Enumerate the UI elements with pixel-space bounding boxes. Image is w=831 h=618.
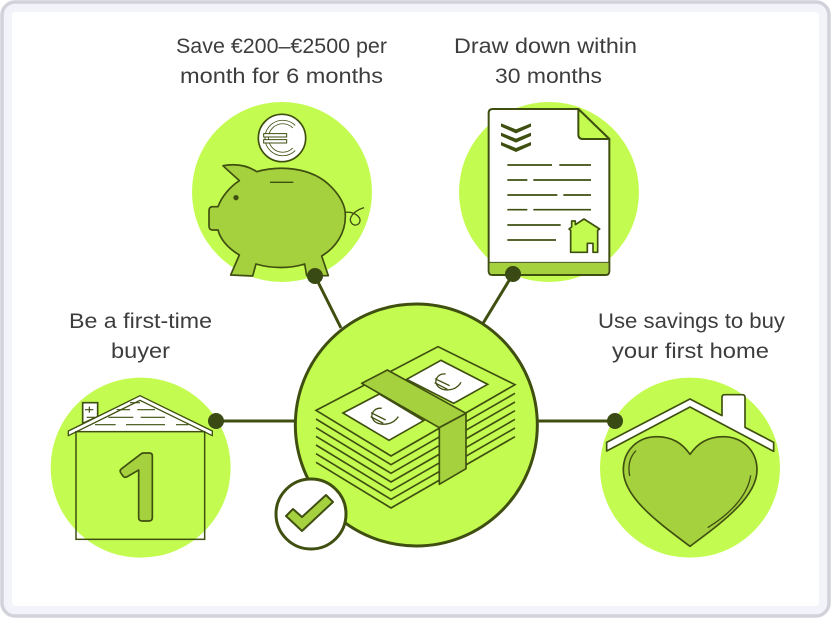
- page: [489, 109, 609, 275]
- roof with chimney: [607, 395, 774, 451]
- icon: heart under roof: [600, 378, 780, 558]
- small house: [569, 219, 600, 252]
- heading: first home: [598, 310, 786, 363]
- heading: draw down: Draw down within: [454, 35, 637, 58]
- bottom strip: [490, 263, 608, 274]
- heart highlights: [629, 451, 751, 528]
- roof tiles: [85, 403, 188, 425]
- walls: [76, 432, 205, 539]
- heading: first-time buyer: Be a first-time: [69, 310, 212, 333]
- pig slot: [270, 180, 293, 184]
- connector dots: [208, 266, 623, 429]
- pig body: [209, 165, 345, 276]
- connector lines: [216, 274, 615, 421]
- icon: piggy bank: [192, 102, 372, 282]
- central money circle: [295, 304, 537, 546]
- pig tail: [346, 208, 364, 225]
- check mark: [286, 495, 333, 531]
- heading: save: month for 6 months: [180, 65, 383, 88]
- heading: draw down: 30 months: [495, 65, 602, 88]
- heading: first-time buyer: buyer: [111, 340, 170, 363]
- roof: [69, 397, 212, 432]
- heading: save: [176, 35, 387, 88]
- heading: first home: your first home: [612, 340, 769, 363]
- heading: first-time buyer: [69, 310, 212, 363]
- heading: draw down: [454, 35, 637, 88]
- paper band: [362, 370, 466, 484]
- chevrons: [501, 123, 531, 152]
- chimney: [83, 403, 98, 423]
- note window right: [407, 360, 488, 403]
- text lines: [507, 165, 591, 240]
- coin: [258, 114, 306, 162]
- heading: first home: Use savings to buy: [598, 310, 786, 333]
- icon: document: [459, 102, 639, 282]
- banknote stack: [316, 347, 515, 508]
- page fold: [578, 109, 609, 139]
- pig eye: [233, 195, 239, 200]
- check badge: [276, 479, 346, 549]
- heading: save: Save €200–€2500 per: [176, 35, 387, 58]
- heart: [623, 437, 757, 546]
- note window left: [343, 394, 424, 440]
- numeral 1: [120, 453, 152, 521]
- icon: house with number one: [51, 378, 231, 558]
